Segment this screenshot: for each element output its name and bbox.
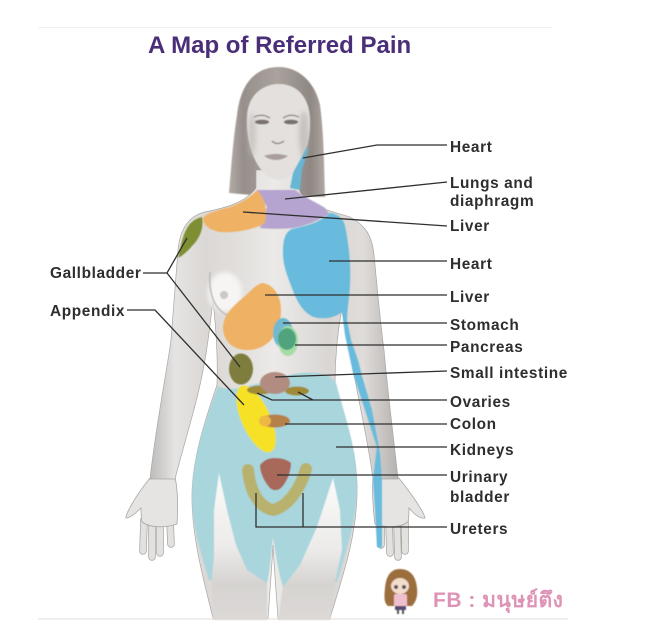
label: Urinary bladder: bladder [450,489,510,506]
gray thigh wedge left [212,473,267,620]
gallbladder zone: abdomen [229,354,253,384]
stomach zone [273,318,293,348]
eyes, nose and mouth [254,115,299,160]
urinary bladder [260,458,291,490]
label: Kidneys: Kidneys [450,442,514,459]
small intestine [260,372,290,394]
right hand [373,477,425,557]
left hand [126,477,178,557]
leader lines [127,145,447,527]
hair back [229,67,325,197]
ovaries [247,386,273,394]
label: Ureters: Ureters [450,521,508,538]
appendix zone [228,380,284,458]
label: Appendix: Appendix [50,303,125,320]
label: Liver: Liver [450,289,490,306]
icon: cartoon girl [384,569,417,614]
pancreas zone [278,326,298,356]
title: A Map of Referred Pain [148,32,411,59]
label: Gallbladder: Gallbladder [50,265,142,282]
label: Lungs and diaphragm: diaphragm [450,193,534,210]
kidneys zone [192,373,357,587]
heart zone: cheek [290,147,308,190]
lungs and diaphragm zone [257,190,329,229]
gallbladder zone: shoulder [178,217,203,258]
breast highlights [208,272,242,312]
label: Urinary bladder: Urinary [450,469,508,486]
colon [260,414,290,428]
label: Lungs and diaphragm: Lungs and [450,175,533,192]
body silhouette [150,170,398,618]
face [247,84,310,180]
liver zone: shoulder [203,190,266,232]
label: Heart: Heart [450,256,492,273]
label: Heart: Heart [450,139,492,156]
label: Liver: Liver [450,218,490,235]
label: Colon: Colon [450,416,497,433]
figure: woman's body [126,67,425,618]
heart zone: chest and arm [283,213,382,548]
ureters [248,469,306,510]
label: Small intestine: Small intestine [450,365,568,382]
label: Stomach: Stomach [450,317,519,334]
caption: FB credit: FB : มนุษย์ตึง [433,588,563,614]
liver zone: abdomen [223,283,281,350]
label: Ovaries: Ovaries [450,394,511,411]
pain zones [178,147,382,620]
gray thigh wedge right [278,478,342,620]
label: Pancreas: Pancreas [450,339,523,356]
